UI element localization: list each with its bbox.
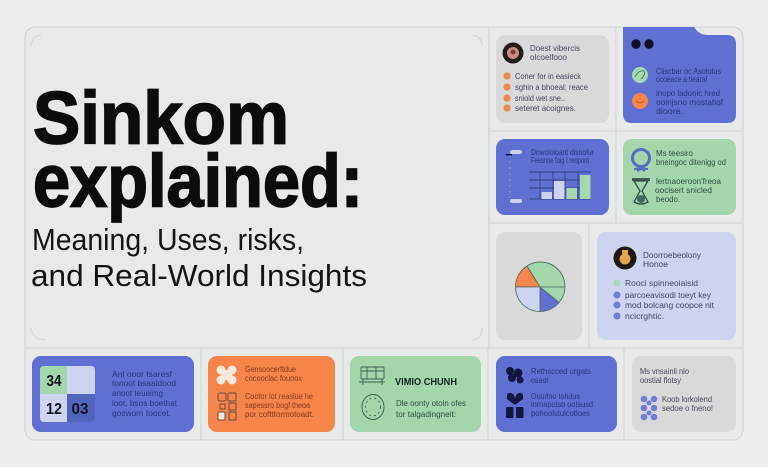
- panel: blue icons: [496, 356, 617, 432]
- bullet list: Rooci spinneoiaisid: [625, 278, 698, 288]
- bullet list: Coner for in easieck: [515, 71, 582, 81]
- title: [33, 76, 363, 222]
- panel text: sedoe o fneno!: [662, 403, 713, 413]
- panel text: [396, 398, 466, 419]
- subtitle: Meaning, Uses, risks,: [32, 223, 304, 257]
- panel text: oocisert snicled: [655, 185, 712, 195]
- number grid: [40, 366, 95, 422]
- icon: blue dots: [641, 396, 657, 420]
- bullet list: [503, 71, 588, 113]
- panel text: [662, 394, 713, 413]
- panel text: Ms teesiro: [656, 148, 693, 158]
- panel: blue bar chart: [496, 139, 609, 215]
- panel heading: [640, 366, 689, 385]
- panel text: lertnaoeroon'freoa: [656, 176, 721, 186]
- bullet list: [614, 278, 715, 321]
- panel text: Gensoocerftdue: [245, 365, 296, 374]
- panel text: bneingoc ditenigg od: [656, 157, 726, 167]
- icon: avatar: [614, 246, 636, 270]
- panel: green heading: [350, 356, 481, 432]
- icon: butterfly: [506, 393, 524, 418]
- chart title: Dowoloioant dlsoofur: [531, 147, 594, 157]
- icon: ring: [632, 150, 650, 171]
- bullet list: sghin a bhoeal: reace: [515, 82, 588, 92]
- panel text: ioot, bsos boethat: [112, 398, 178, 408]
- panel text: Anl ooor tsaresf: [112, 369, 173, 379]
- panel text: Cootor lot reaslue he: [245, 392, 314, 401]
- panel heading: Ms vnsainli nlo: [640, 366, 689, 376]
- icon: dark cluster: [506, 367, 524, 384]
- icon: grid of symbols: [218, 393, 236, 420]
- panel: blue tab: [623, 27, 736, 123]
- panel text: beodo.: [656, 194, 680, 204]
- icon: avatar: [502, 42, 524, 64]
- panel text: Cliscbar oc Asotolus: [656, 66, 721, 76]
- panel text: [531, 366, 593, 418]
- panel heading: Doest vibercis: [530, 43, 580, 53]
- icon: two dots: [631, 39, 654, 49]
- panel text: ooinjsno mostatiof: [656, 97, 724, 107]
- bullet list: seteret acoignes.: [515, 103, 576, 113]
- panel text: anoot teueimg: [112, 388, 163, 398]
- panel: gray list: [496, 35, 609, 123]
- title: explained:: [33, 140, 363, 222]
- panel: blue numbers: [32, 356, 194, 432]
- panel text: tonoot bsaaldood: [112, 378, 176, 388]
- chart title: [531, 147, 594, 165]
- bar chart: [529, 172, 591, 199]
- panel text: por coftttormotoadt.: [245, 410, 314, 419]
- slider scale: [506, 150, 522, 203]
- panel heading text: VIMIO CHUNH: [395, 377, 457, 388]
- number grid: 12: [46, 401, 62, 418]
- panel heading: oostial flotsy: [640, 375, 682, 385]
- panel text: ocoeace a tiearal: [656, 74, 707, 84]
- panel text: pohoolstulcotloes: [531, 408, 590, 418]
- panel text: osaol: [531, 375, 548, 385]
- panel text: cocooclac fouoox: [245, 374, 302, 383]
- icon: white cross: [216, 366, 236, 384]
- panel text: [655, 148, 726, 204]
- number grid: 34: [46, 373, 62, 390]
- icon: orange circle: [632, 93, 648, 109]
- icon: clock: [362, 394, 384, 420]
- icon: sofa: [359, 367, 385, 385]
- bullet list: mod bolcang coopce nit: [625, 300, 715, 310]
- panel text: [112, 369, 178, 418]
- panel text: [656, 66, 724, 116]
- panel: green tips: [623, 139, 736, 215]
- pie chart: [515, 262, 565, 312]
- panel heading: [530, 43, 580, 62]
- panel text: Koob lorkolend: [662, 394, 712, 404]
- panel text: tor talgadingneit:: [396, 409, 456, 419]
- panel text: [245, 365, 314, 419]
- bullet list: sniold wet sne..: [515, 93, 565, 103]
- panel heading: Honoe: [643, 259, 668, 269]
- panel: pie chart: [496, 232, 582, 340]
- panel text: inrnapotso ootsusd: [531, 399, 593, 409]
- panel: gray note: [632, 356, 736, 432]
- panel text: Rethscced urgats: [531, 366, 591, 376]
- icon: hourglass: [632, 178, 650, 204]
- panel text: dioore.: [656, 106, 683, 116]
- title: Sinkom: [33, 76, 289, 160]
- panel heading: [643, 250, 702, 269]
- chart title: Feesnoe foig t reqpont: [531, 155, 589, 165]
- panel: lavender list: [597, 232, 736, 340]
- panel heading: Doorroebeolony: [643, 250, 702, 260]
- subtitle: and Real-World Insights: [31, 259, 367, 293]
- panel: orange: [208, 356, 335, 432]
- bullet list: ncicrghtic.: [625, 311, 664, 321]
- bullet list: parcoeavisodi toeyt key: [625, 290, 712, 300]
- panel text: Dle oonty otoin ofes: [396, 398, 466, 408]
- number grid: 03: [72, 401, 89, 418]
- subtitle: [31, 223, 367, 293]
- panel text: gosworn toocet.: [112, 408, 171, 418]
- panel text: sapessro bogf theoa: [245, 401, 310, 410]
- panel heading: olcoelfooo: [530, 52, 567, 62]
- panel text: inopo ladonic hred: [656, 88, 720, 98]
- panel text: Ooorlno tohdos: [531, 391, 580, 401]
- icon: green circle: [632, 67, 648, 83]
